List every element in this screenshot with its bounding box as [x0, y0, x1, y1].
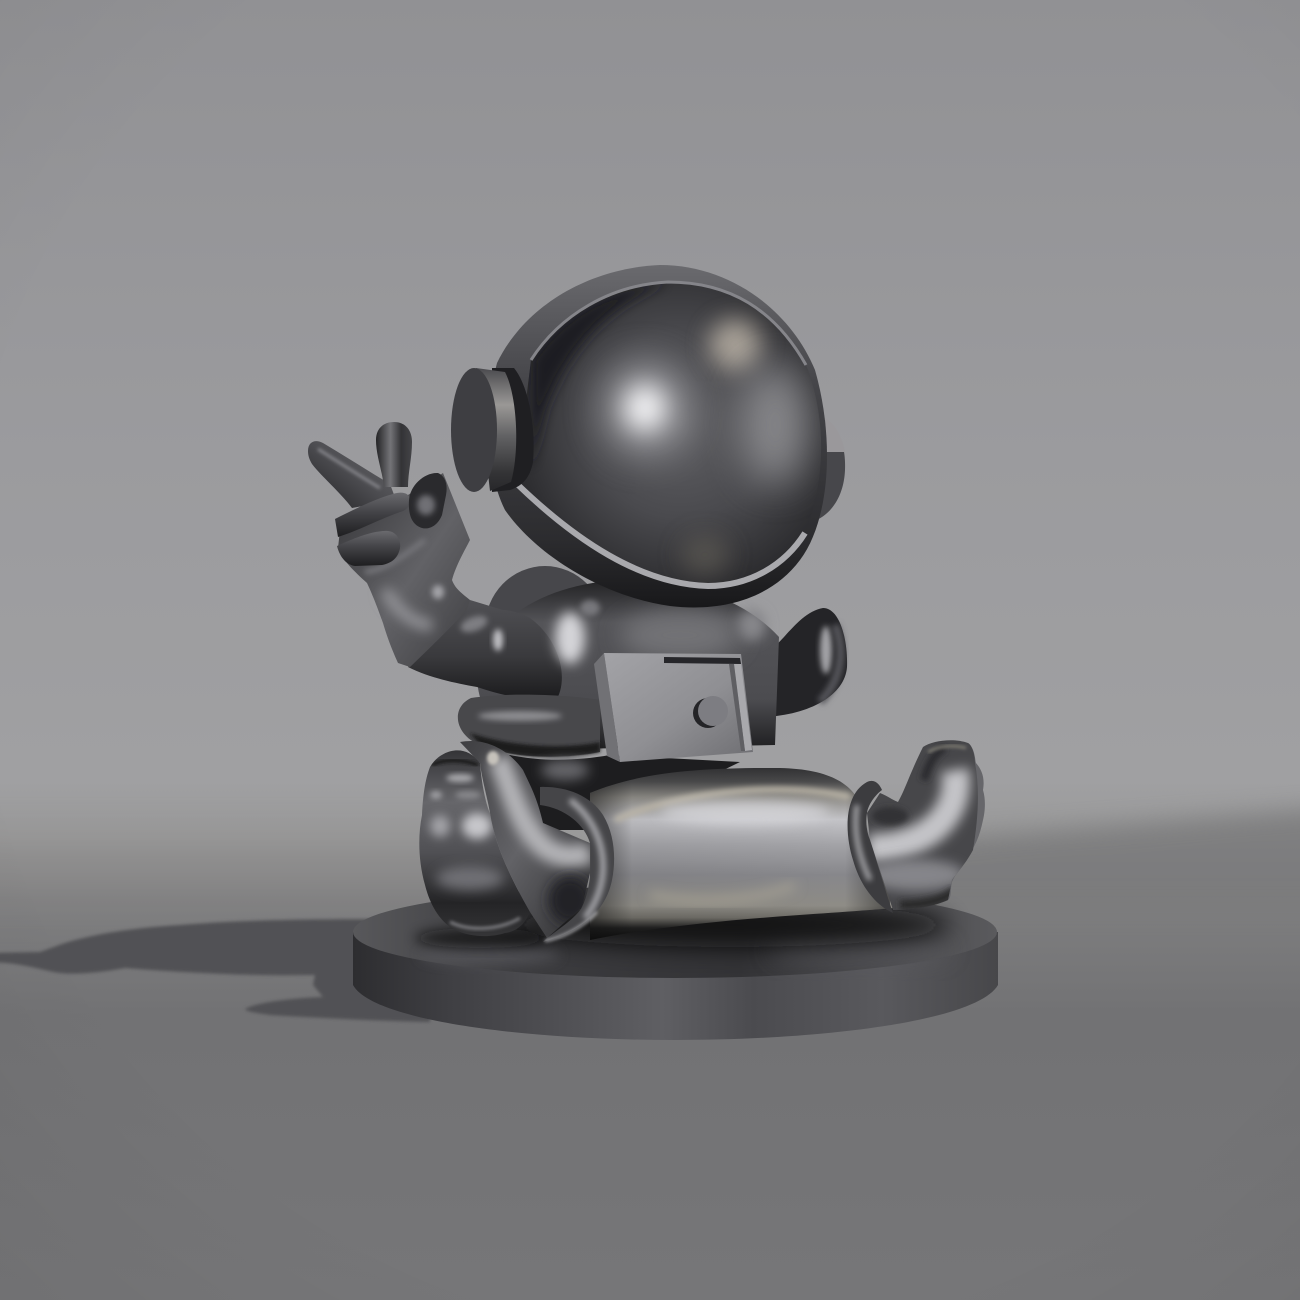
backpack side	[594, 653, 620, 762]
raised arm	[408, 600, 562, 702]
upper curled finger	[335, 493, 410, 537]
backpack knob	[693, 696, 728, 728]
middle finger	[376, 422, 412, 487]
ear ring	[492, 368, 534, 492]
thigh	[590, 760, 893, 950]
ear face	[451, 368, 497, 492]
right leg cuff	[848, 781, 893, 913]
raised glove with peace sign	[308, 422, 470, 667]
round base	[353, 886, 998, 1040]
helmet	[489, 265, 827, 607]
helmet shell	[489, 265, 827, 607]
backpack	[594, 653, 753, 762]
left leg cuff	[540, 787, 614, 942]
torso highlights	[493, 600, 600, 664]
torso	[477, 566, 779, 750]
ear cylinder	[476, 368, 516, 491]
cast shadow on floor	[0, 919, 430, 1022]
backpack side strip	[734, 664, 752, 751]
right sole edge	[940, 743, 985, 900]
base side	[353, 932, 998, 1040]
base contact shadow	[510, 903, 950, 947]
glove body	[338, 473, 470, 667]
left ear disc	[451, 368, 534, 492]
thumb	[409, 473, 447, 528]
left shin	[460, 741, 592, 938]
base front sheen	[770, 936, 950, 964]
backpack slot	[664, 657, 741, 664]
lower torso	[490, 750, 740, 830]
backpack front	[604, 653, 753, 762]
base top	[353, 886, 997, 978]
back shoulder	[485, 566, 605, 690]
helmet dome	[516, 282, 821, 587]
visor rim lower	[516, 483, 805, 586]
waist belt ring	[458, 695, 600, 757]
visor rim upper	[531, 282, 806, 365]
right foot	[865, 740, 985, 910]
left foot sole	[419, 750, 530, 936]
right ear disc	[812, 417, 845, 522]
dome highlights	[603, 362, 687, 454]
lower curled finger	[337, 531, 400, 566]
index finger	[308, 441, 396, 508]
right hand behind body	[750, 608, 847, 717]
